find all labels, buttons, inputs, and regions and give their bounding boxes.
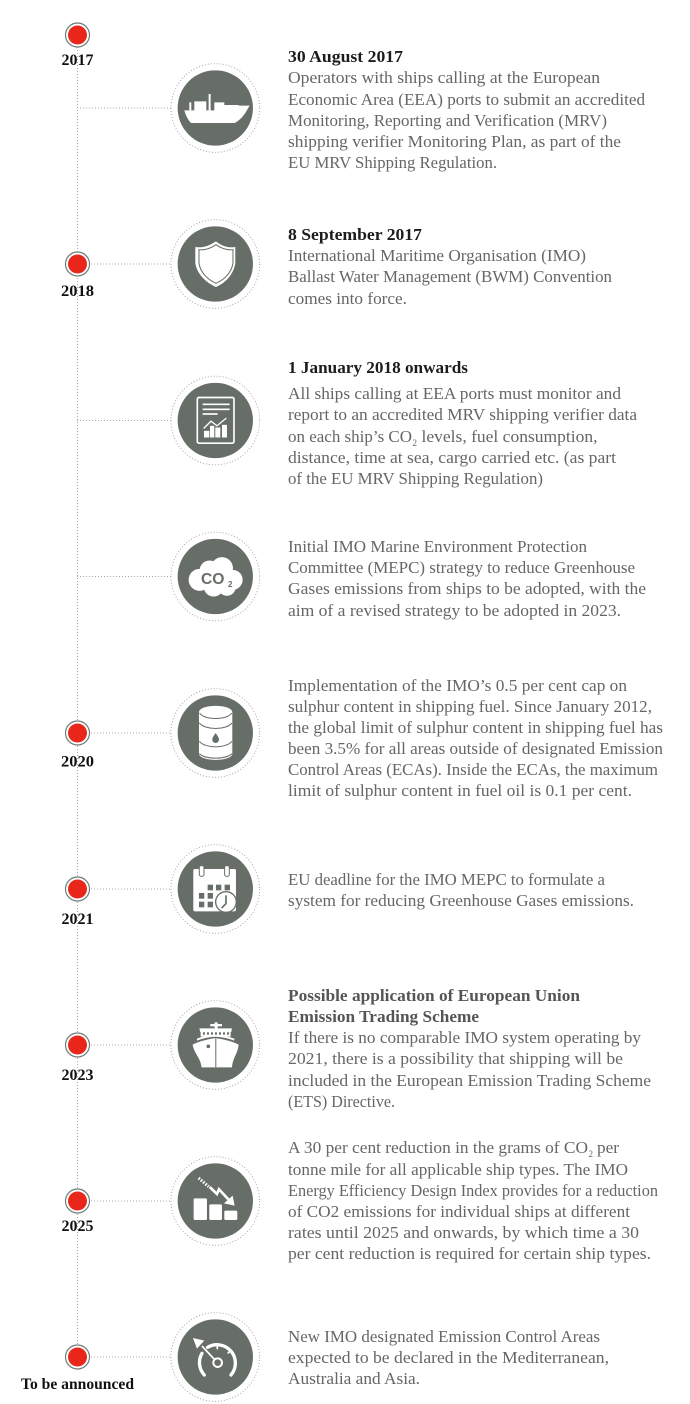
text: initial IMO strategy: Initial IMO Marine Environment Protection	[288, 537, 587, 556]
text: new emission control areas	[288, 1327, 609, 1388]
text: 1 January 2018 onwards: report to an accredited MRV shipping verifier data	[288, 405, 638, 424]
text: sulphur cap: been 3.5% for all areas outside of designated Emission	[288, 739, 663, 758]
icon: falling bar chart	[171, 1157, 260, 1245]
text: sulphur cap: Implementation of the IMO’s 0.5 per cent cap on	[288, 676, 627, 695]
text: 1 January 2018 onwards: 2	[412, 438, 417, 448]
connector: 2021	[91, 888, 171, 890]
text: 30 per cent reduction: 2	[588, 1149, 593, 1159]
text: sulphur cap: the global limit of sulphur content in shipping fuel has	[288, 718, 663, 737]
marker: 2025: 2025	[62, 1218, 94, 1235]
text: sulphur cap: Control Areas (ECAs). Inside the ECAs, the maximum	[288, 760, 658, 779]
text: 1 January 2018 onwards: distance, time at sea, cargo carried etc. (as part	[288, 448, 616, 467]
text: initial IMO strategy: Gases emissions from ships to be adopted, with the	[288, 579, 646, 598]
text: sulphur cap: sulphur content in shipping fuel. Since January 2012,	[288, 697, 652, 716]
connector: CO2 item	[77, 576, 171, 578]
text: 30 per cent reduction: tonne mile for all applicable ship types. The IMO	[288, 1160, 628, 1179]
marker: 2017	[62, 23, 94, 69]
text: EU deadline	[288, 870, 634, 910]
marker: 2017: 2017	[62, 52, 94, 69]
text: 30 August 2017: Monitoring, Reporting and Verification (MRV)	[288, 111, 607, 130]
text: 30 per cent reduction: per	[597, 1138, 620, 1157]
text: 8 September 2017: 8 September 2017	[288, 225, 422, 244]
text: 30 per cent reduction: of CO2 emissions for individual ships at different	[288, 1202, 630, 1221]
text: initial IMO strategy: aim of a revised strategy to be adopted in 2023.	[288, 601, 621, 620]
icon: speedometer	[171, 1313, 260, 1401]
text: 30 per cent reduction: per cent reduction is required for certain ship types.	[288, 1244, 651, 1263]
connector: 2020	[91, 732, 171, 734]
text: 8 September 2017	[288, 225, 612, 308]
icon: oil barrel	[171, 689, 260, 777]
icon: ship front view	[171, 1001, 260, 1089]
text: 1 January 2018 onwards: All ships calling at EEA ports must monitor and	[288, 384, 622, 403]
text: 1 January 2018 onwards	[288, 358, 638, 488]
marker: 2018: 2018	[61, 283, 94, 300]
icon: report with chart	[171, 376, 260, 465]
text: sulphur cap: limit of sulphur content in fuel oil is 0.1 per cent.	[288, 781, 632, 800]
text: EU Emission Trading Scheme: (ETS) Directive.	[288, 1092, 395, 1111]
connector: to be announced	[91, 1356, 171, 1358]
text: new emission control areas: Australia and Asia.	[288, 1369, 420, 1388]
marker: To be announced	[21, 1345, 134, 1393]
connector: 2023	[91, 1044, 171, 1046]
icon: shield	[171, 220, 260, 308]
text: initial IMO strategy: Committee (MEPC) strategy to reduce Greenhouse	[288, 558, 635, 577]
icon: CO2 cloud: CO	[201, 571, 224, 588]
text: 1 January 2018 onwards: on each ship’s CO	[288, 427, 412, 446]
text: EU Emission Trading Scheme: Possible application of European Union	[288, 986, 580, 1005]
text: EU Emission Trading Scheme: If there is no comparable IMO system operating by	[288, 1028, 642, 1047]
text: 30 August 2017: Operators with ships calling at the European	[288, 68, 600, 87]
connector: 2018	[91, 263, 171, 265]
text: 30 August 2017	[288, 47, 646, 172]
text: 30 August 2017: shipping verifier Monitoring Plan, as part of the	[288, 132, 621, 151]
marker: 2020	[61, 721, 94, 770]
marker: To be announced: To be announced	[21, 1376, 134, 1393]
marker: 2021	[62, 877, 94, 928]
text: EU Emission Trading Scheme: 2021, there is a possibility that shipping will be	[288, 1049, 623, 1068]
connector: 2025	[91, 1200, 171, 1202]
text: 30 per cent reduction: Energy Efficiency Design Index provides for a reduction	[288, 1181, 658, 1200]
text: 8 September 2017: comes into force.	[288, 289, 407, 308]
marker: 2021: 2021	[62, 911, 94, 928]
text: 30 August 2017: Economic Area (EEA) ports to submit an accredited	[288, 90, 646, 109]
text: EU Emission Trading Scheme	[288, 986, 651, 1111]
icon: cargo ship	[171, 64, 260, 152]
text: initial IMO strategy	[288, 537, 646, 620]
text: 1 January 2018 onwards: levels, fuel consumption,	[422, 427, 598, 446]
text: 30 August 2017: EU MRV Shipping Regulation.	[288, 153, 497, 172]
text: 8 September 2017: International Maritime Organisation (IMO)	[288, 246, 586, 265]
icon: CO2 cloud: 2	[228, 580, 233, 589]
marker: 2018	[61, 252, 94, 300]
text: 30 per cent reduction: A 30 per cent reduction in the grams of CO	[288, 1138, 588, 1157]
text: 30 per cent reduction	[288, 1138, 658, 1263]
marker: 2025	[62, 1189, 94, 1235]
text: EU Emission Trading Scheme: Emission Trading Scheme	[288, 1007, 479, 1026]
connector: first item	[77, 107, 171, 109]
icon: CO2 cloud	[171, 532, 260, 621]
marker: 2023: 2023	[62, 1067, 94, 1084]
text: EU Emission Trading Scheme: included in the European Emission Trading Scheme	[288, 1071, 651, 1090]
text: sulphur cap	[288, 676, 663, 800]
marker: 2020: 2020	[61, 754, 94, 770]
text: 1 January 2018 onwards: of the EU MRV Shipping Regulation)	[288, 469, 543, 488]
icon: calendar with clock	[171, 845, 260, 933]
connector: report item	[77, 420, 171, 422]
text: 8 September 2017: Ballast Water Management (BWM) Convention	[288, 267, 612, 286]
text: EU deadline: system for reducing Greenhouse Gases emissions.	[288, 891, 634, 910]
text: 30 August 2017: 30 August 2017	[288, 47, 403, 66]
text: 30 per cent reduction: rates until 2025 and onwards, by which time a 30	[288, 1223, 639, 1242]
text: 1 January 2018 onwards: 1 January 2018 onwards	[288, 358, 469, 377]
text: new emission control areas: expected to be declared in the Mediterranean,	[288, 1348, 609, 1367]
text: new emission control areas: New IMO designated Emission Control Areas	[288, 1327, 600, 1346]
text: EU deadline: EU deadline for the IMO MEPC to formulate a	[288, 870, 606, 889]
marker: 2023	[62, 1033, 94, 1084]
timeline vertical line	[76, 35, 78, 1357]
